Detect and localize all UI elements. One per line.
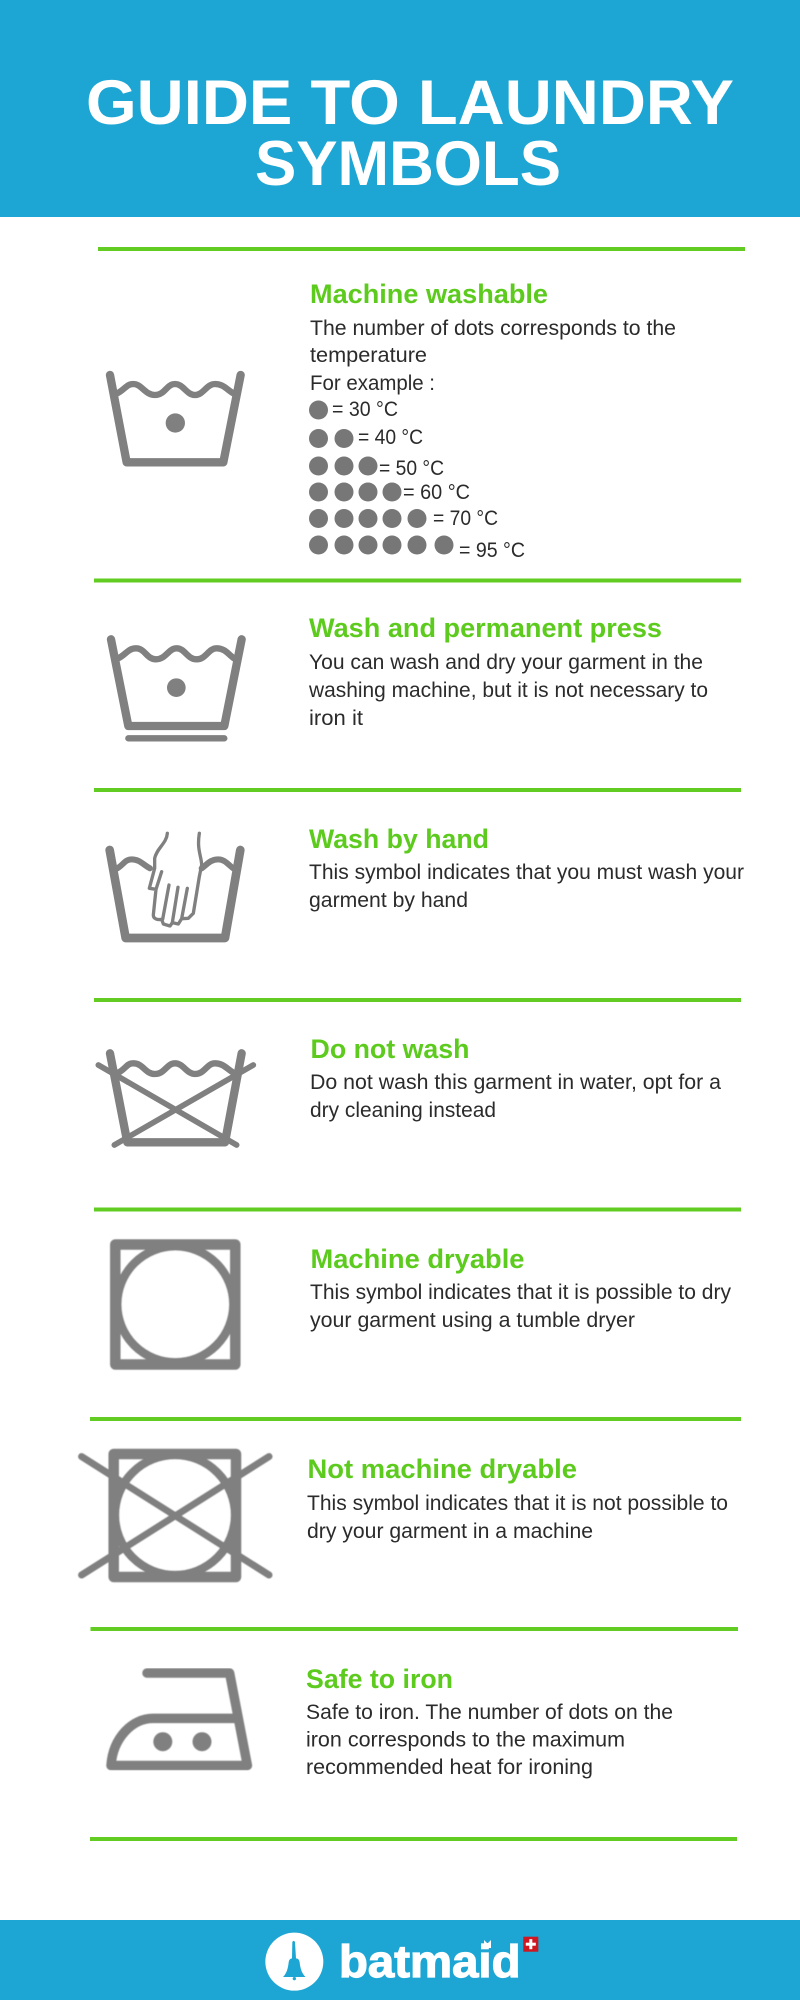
50 degrees row: = 50 °C bbox=[379, 457, 444, 480]
95 degrees row bbox=[309, 536, 525, 562]
50 degrees row bbox=[309, 456, 444, 480]
95 degrees row: = 95 °C bbox=[459, 539, 525, 562]
heading: Do not wash bbox=[310, 1034, 470, 1064]
description: garment by hand bbox=[309, 889, 468, 912]
description: dry your garment in a machine bbox=[307, 1520, 593, 1543]
icon: square with circle bbox=[115, 1244, 235, 1364]
description: You can wash and dry your garment in the bbox=[309, 651, 703, 674]
60 degrees row: = 60 °C bbox=[403, 481, 470, 504]
icon: wash tub with one dot bbox=[110, 375, 241, 462]
heading: Wash and permanent press bbox=[309, 613, 662, 643]
description bbox=[309, 861, 744, 912]
description: iron corresponds to the maximum bbox=[306, 1728, 625, 1752]
panel: wash by hand bbox=[110, 824, 744, 938]
description: recommended heat for ironing bbox=[306, 1756, 593, 1779]
footer banner bbox=[0, 1920, 800, 2000]
40 degrees row bbox=[309, 426, 423, 449]
icon: cat ears on letter i bbox=[484, 1940, 491, 1948]
70 degrees row bbox=[309, 507, 498, 530]
panel: machine dryable bbox=[115, 1244, 731, 1364]
panel: machine washable bbox=[110, 279, 676, 562]
description: Do not wash this garment in water, opt for a bbox=[310, 1071, 721, 1094]
icon: crossed square with circle bbox=[82, 1454, 269, 1577]
icon: swiss flag bbox=[523, 1937, 538, 1952]
icon: wash tub with hand bbox=[110, 833, 240, 938]
70 degrees row: = 70 °C bbox=[433, 507, 498, 530]
title bbox=[86, 68, 734, 199]
heading: Machine dryable bbox=[310, 1244, 524, 1274]
description bbox=[310, 317, 676, 395]
heading: Machine washable bbox=[310, 279, 548, 309]
icon: crossed wash tub bbox=[98, 1053, 253, 1145]
description: This symbol indicates that you must wash your bbox=[309, 861, 744, 884]
title: SYMBOLS bbox=[255, 129, 561, 199]
description: your garment using a tumble dryer bbox=[310, 1309, 635, 1332]
description bbox=[307, 1492, 728, 1543]
description bbox=[308, 651, 708, 730]
heading: Not machine dryable bbox=[308, 1454, 577, 1484]
description: dry cleaning instead bbox=[310, 1099, 496, 1122]
40 degrees row: = 40 °C bbox=[358, 426, 423, 449]
wordmark: batmaid bbox=[339, 1936, 520, 1987]
description: For example : bbox=[310, 372, 435, 395]
description: iron it bbox=[309, 707, 363, 730]
description: Safe to iron. The number of dots on the bbox=[306, 1701, 673, 1724]
description: This symbol indicates that it is not possible to bbox=[307, 1492, 728, 1515]
title: GUIDE TO LAUNDRY bbox=[86, 68, 734, 138]
icon: bell in circle bbox=[265, 1933, 323, 1991]
batmaid logo bbox=[265, 1933, 538, 1991]
panel: wash and permanent press bbox=[111, 613, 708, 738]
60 degrees row bbox=[309, 481, 470, 504]
description bbox=[306, 1701, 673, 1779]
description bbox=[310, 1071, 721, 1122]
icon: iron with two dots bbox=[111, 1673, 247, 1766]
icon: wash tub with dot and bar bbox=[111, 639, 242, 738]
description: This symbol indicates that it is possible to dry bbox=[310, 1281, 731, 1304]
heading: Safe to iron bbox=[306, 1664, 453, 1694]
30 degrees row: = 30 °C bbox=[332, 398, 398, 421]
temperature legend bbox=[309, 398, 525, 562]
description: washing machine, but it is not necessary to bbox=[308, 679, 708, 702]
panel: not machine dryable bbox=[82, 1454, 728, 1577]
panel: do not wash bbox=[98, 1034, 721, 1145]
description: temperature bbox=[310, 344, 427, 367]
description bbox=[310, 1281, 731, 1332]
panel: safe to iron bbox=[111, 1664, 673, 1779]
header banner bbox=[0, 0, 800, 217]
description: The number of dots corresponds to the bbox=[310, 317, 676, 340]
heading: Wash by hand bbox=[309, 824, 489, 854]
